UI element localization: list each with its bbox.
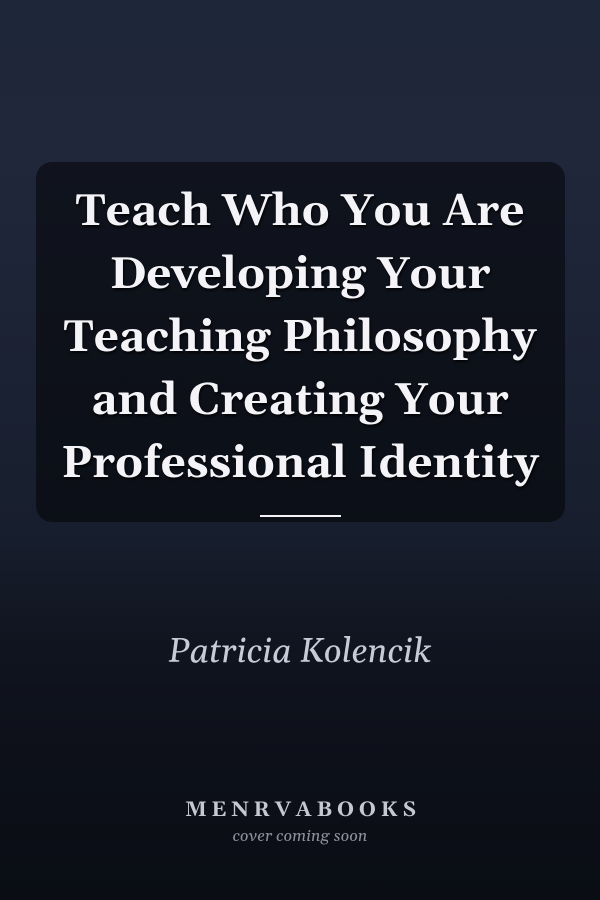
title: Teaching Philosophy — [63, 311, 537, 367]
cover note: cover coming soon — [233, 827, 367, 847]
panel: title backdrop — [36, 162, 565, 522]
publisher name: MENRVABOOKS — [185, 798, 421, 824]
title: Professional Identity — [61, 437, 539, 493]
title: Developing Your — [109, 248, 491, 304]
title: Teach Who You Are — [75, 185, 525, 241]
title divider rule — [260, 515, 341, 517]
title: and Creating Your — [91, 374, 509, 430]
title — [61, 185, 540, 493]
author name: Patricia Kolencik — [169, 630, 431, 674]
